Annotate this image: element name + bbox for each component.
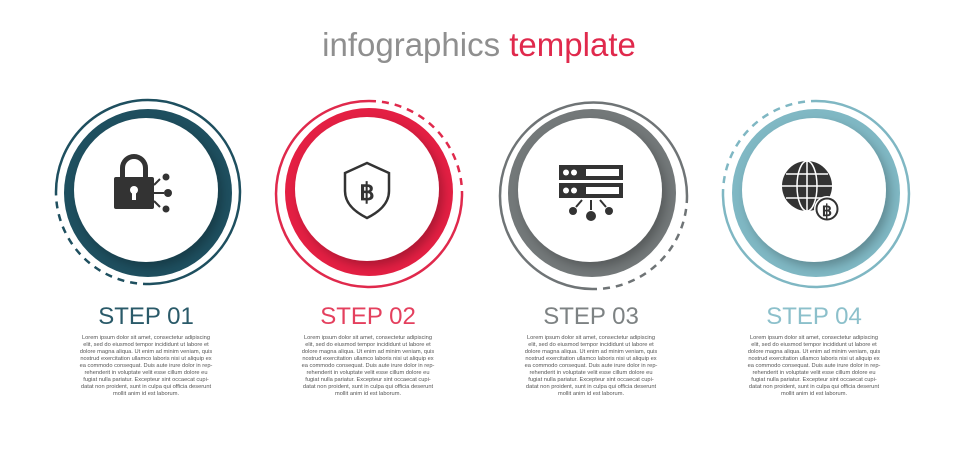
body text: dolore magna aliqua. Ut enim ad minim veniam, quis xyxy=(80,349,212,355)
step labels: STEP 03 xyxy=(543,303,639,330)
icon: server network xyxy=(559,165,623,221)
icon: globe bitcoin: ฿ xyxy=(822,203,832,220)
step labels: STEP 02 xyxy=(320,303,416,330)
body text xyxy=(80,335,880,397)
thick ring step 3 xyxy=(508,109,676,277)
body text: mollit anim id est laborum. xyxy=(113,391,179,397)
step labels: STEP 01 xyxy=(98,303,194,330)
body text: fugiat nulla pariatur. Excepteur sint occaecat cupi- xyxy=(83,377,209,383)
icon: padlock network xyxy=(114,154,172,212)
outer ring step 1 xyxy=(56,100,240,284)
step labels xyxy=(98,303,862,330)
body text: ea commodo consequat. Duis aute irure dolor in rep- xyxy=(80,363,212,369)
outer ring step 2 xyxy=(276,101,462,287)
outer ring step 3 xyxy=(500,103,687,289)
body text: nostrud exercitation ullamco laboris nisi ut aliquip ex xyxy=(80,356,212,362)
step labels: STEP 04 xyxy=(766,303,862,330)
body text: datat non proident, sunt in culpa qui officia deserunt xyxy=(81,384,211,390)
icon: shield bitcoin xyxy=(345,163,389,218)
thick ring step 2 xyxy=(285,108,453,276)
body text: Lorem ipsum dolor sit amet, consectetur adipiscing xyxy=(82,335,210,341)
body text: rehenderit in voluptate velit esse cillum dolore eu xyxy=(85,370,207,376)
step 2 xyxy=(276,101,462,287)
body text: elit, sed do eiusmod tempor incididunt ut labore et xyxy=(83,342,209,348)
icon: globe bitcoin xyxy=(782,161,840,222)
icon: shield bitcoin: ฿ xyxy=(359,179,375,206)
title: infographics template xyxy=(322,26,636,63)
thick ring step 1 xyxy=(64,109,232,277)
step 3 xyxy=(500,103,687,289)
thick ring step 4 xyxy=(732,109,900,277)
step 1 xyxy=(56,100,240,284)
step 4 xyxy=(723,101,909,287)
outer ring step 4 xyxy=(723,101,909,287)
